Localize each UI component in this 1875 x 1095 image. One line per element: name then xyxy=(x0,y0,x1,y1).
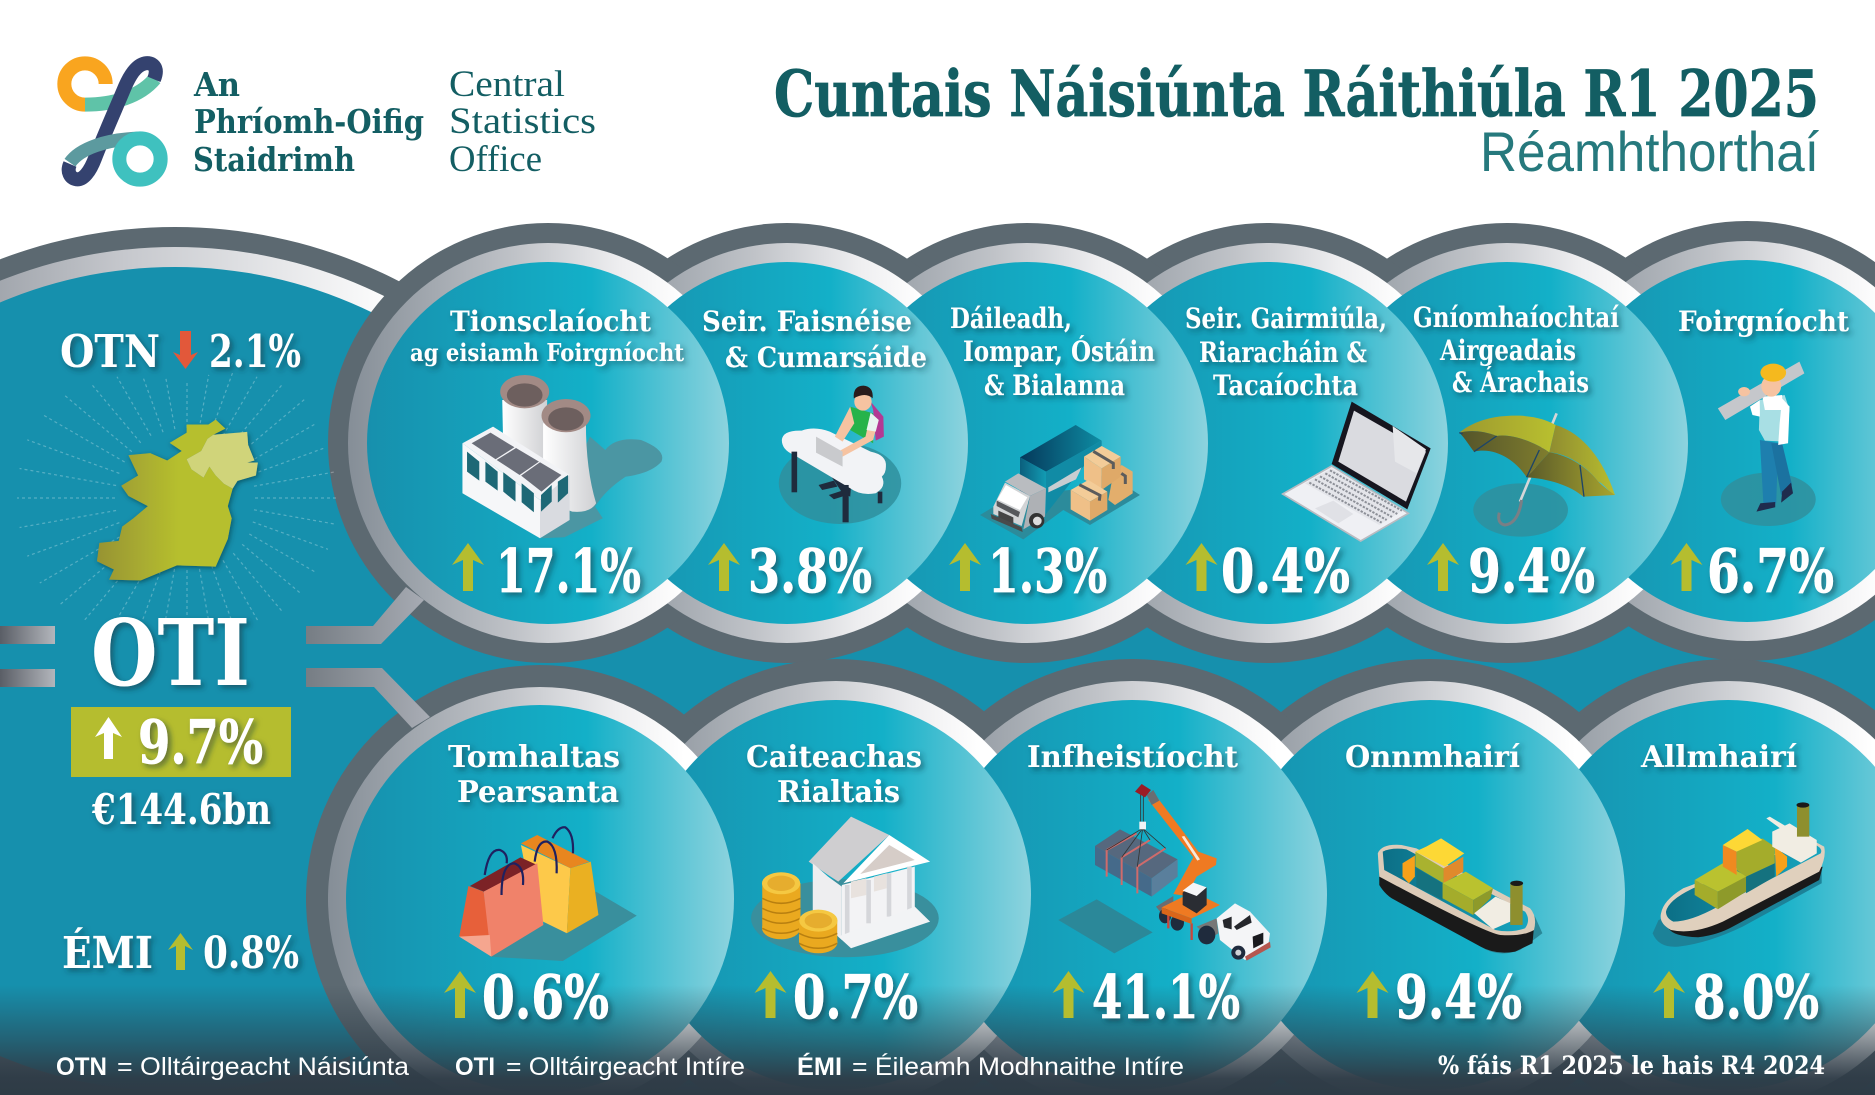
connected circle rings xyxy=(0,221,1875,1095)
OTN value: OTN xyxy=(60,325,160,378)
value: 6.7% xyxy=(1707,537,1834,607)
arrow up xyxy=(1653,971,1685,1018)
heading xyxy=(1185,302,1387,402)
value: 9.4% xyxy=(1468,537,1595,607)
icon: shopping bags xyxy=(459,827,637,961)
rays behind map xyxy=(17,371,337,631)
arrow up xyxy=(1052,971,1084,1018)
heading: & Cumarsáide xyxy=(725,341,927,374)
arrow up xyxy=(754,971,786,1018)
English name: Central xyxy=(449,64,565,105)
heading: ag eisiamh Foirgníocht xyxy=(410,338,684,367)
value: 1.3% xyxy=(988,537,1107,607)
panel: Dáileadh, Iompar, Óstáin & Bialanna xyxy=(949,302,1155,607)
EMI definition: ÉMI xyxy=(797,1052,842,1081)
title: Réamhthorthaí xyxy=(1480,120,1819,183)
arrow up xyxy=(1186,543,1218,591)
arrow up xyxy=(452,543,484,591)
heading: Caiteachas xyxy=(746,740,922,775)
EMI value: ÉMI xyxy=(62,926,153,979)
footer legend xyxy=(56,1051,1825,1081)
Irish name xyxy=(193,65,424,179)
heading xyxy=(448,740,620,810)
icon: CSO logo mark xyxy=(64,63,161,180)
heading xyxy=(410,305,684,367)
panel: Tomhaltas Pearsanta xyxy=(444,740,637,1033)
heading: & Árachais xyxy=(1452,366,1589,399)
heading: Dáileadh, xyxy=(950,302,1072,335)
icon: container ship xyxy=(1378,838,1542,953)
arrow up xyxy=(708,543,740,591)
EMI definition: = Éileamh Modhnaithe Intíre xyxy=(852,1052,1184,1081)
value: 3.8% xyxy=(748,537,872,607)
OTI definition: OTI xyxy=(455,1053,495,1081)
arrow up xyxy=(1427,543,1459,591)
panel: Onnmhairí xyxy=(1345,740,1542,1033)
English name: Office xyxy=(449,139,542,180)
title xyxy=(774,57,1819,183)
OTN value xyxy=(60,325,301,378)
panel: Gníomhaíochtaí Airgeadais & Árachais xyxy=(1413,301,1619,607)
icon: person at cloud desk xyxy=(779,386,901,524)
arrow up xyxy=(1356,971,1388,1018)
OTN definition: OTN xyxy=(56,1053,107,1081)
bottom dark fade xyxy=(0,985,1875,1095)
heading xyxy=(746,740,922,810)
heading: Airgeadais xyxy=(1439,334,1576,367)
EMI value: 0.8% xyxy=(203,928,299,979)
icon: factory xyxy=(462,375,662,538)
icon: government building and coins xyxy=(751,817,939,957)
value: 0.6% xyxy=(482,963,609,1033)
heading xyxy=(1413,301,1619,399)
icon: laptop xyxy=(1283,402,1431,541)
arrow up xyxy=(949,543,981,591)
icon: map of Ireland xyxy=(97,420,258,580)
arrow up xyxy=(1670,543,1702,591)
heading: Tomhaltas xyxy=(448,740,620,775)
value: 9.4% xyxy=(1395,963,1522,1033)
English name xyxy=(449,64,596,180)
icon: cargo ship xyxy=(1653,802,1825,947)
icon: umbrella xyxy=(1459,413,1615,537)
header logo xyxy=(64,63,596,180)
teal background xyxy=(0,450,1875,1095)
heading xyxy=(702,305,927,374)
heading: Tionsclaíocht xyxy=(450,305,651,338)
panel: Allmhairí xyxy=(1640,740,1825,1033)
Irish name: An xyxy=(193,65,240,104)
OTN value: 2.1% xyxy=(209,325,301,378)
icon: construction worker xyxy=(1718,362,1816,526)
comparison note: % fáis R1 2025 le hais R4 2024 xyxy=(1438,1051,1825,1080)
OTN definition: = Olltáirgeacht Náisiúnta xyxy=(117,1053,409,1081)
Irish name: Staidrimh xyxy=(193,140,355,179)
OTI value box: 9.7% xyxy=(138,708,263,778)
heading: Rialtais xyxy=(777,775,900,810)
panel: Seir. Faisnéise & Cumarsáide xyxy=(702,305,927,607)
heading: Gníomhaíochtaí xyxy=(1413,301,1619,334)
OTI amount: €144.6bn xyxy=(91,785,271,834)
heading: Onnmhairí xyxy=(1345,740,1521,775)
icon: crane lifting container xyxy=(1058,784,1271,961)
value: 8.0% xyxy=(1693,963,1819,1033)
large left circle xyxy=(0,227,730,1095)
heading: & Bialanna xyxy=(984,369,1125,402)
panel: Caiteachas Rialtais xyxy=(746,740,939,1033)
panel: headline indicators xyxy=(17,325,337,979)
heading: Foirgníocht xyxy=(1678,305,1849,338)
heading: Pearsanta xyxy=(457,775,619,810)
heading: Tacaíochta xyxy=(1213,369,1358,402)
panel: Foirgníocht xyxy=(1670,305,1849,607)
value: 17.1% xyxy=(496,537,641,607)
heading xyxy=(950,302,1155,402)
heading: Infheistíocht xyxy=(1027,740,1238,775)
icon: delivery truck and boxes xyxy=(980,425,1140,539)
value: 41.1% xyxy=(1092,963,1240,1033)
value: 0.7% xyxy=(793,963,918,1033)
panel: Tionsclaíocht xyxy=(410,305,684,607)
panel: Seir. Gairmiúla, Riaracháin & Tacaíochta xyxy=(1185,302,1431,607)
heading: Seir. Faisnéise xyxy=(702,305,912,338)
heading: Seir. Gairmiúla, xyxy=(1185,302,1387,335)
OTI value box xyxy=(71,707,291,778)
OTI definition: = Olltáirgeacht Intíre xyxy=(506,1053,745,1081)
heading: Iompar, Óstáin xyxy=(963,334,1155,368)
English name: Statistics xyxy=(449,101,596,142)
EMI value xyxy=(62,926,299,979)
heading: Riaracháin & xyxy=(1199,336,1367,369)
arrow up xyxy=(444,971,476,1018)
OTI heading: OTI xyxy=(91,599,250,707)
Irish name: Phríomh-Oifig xyxy=(194,102,424,141)
panel: Infheistíocht xyxy=(1027,740,1271,1033)
heading: Allmhairí xyxy=(1640,740,1798,775)
value: 0.4% xyxy=(1221,537,1350,607)
